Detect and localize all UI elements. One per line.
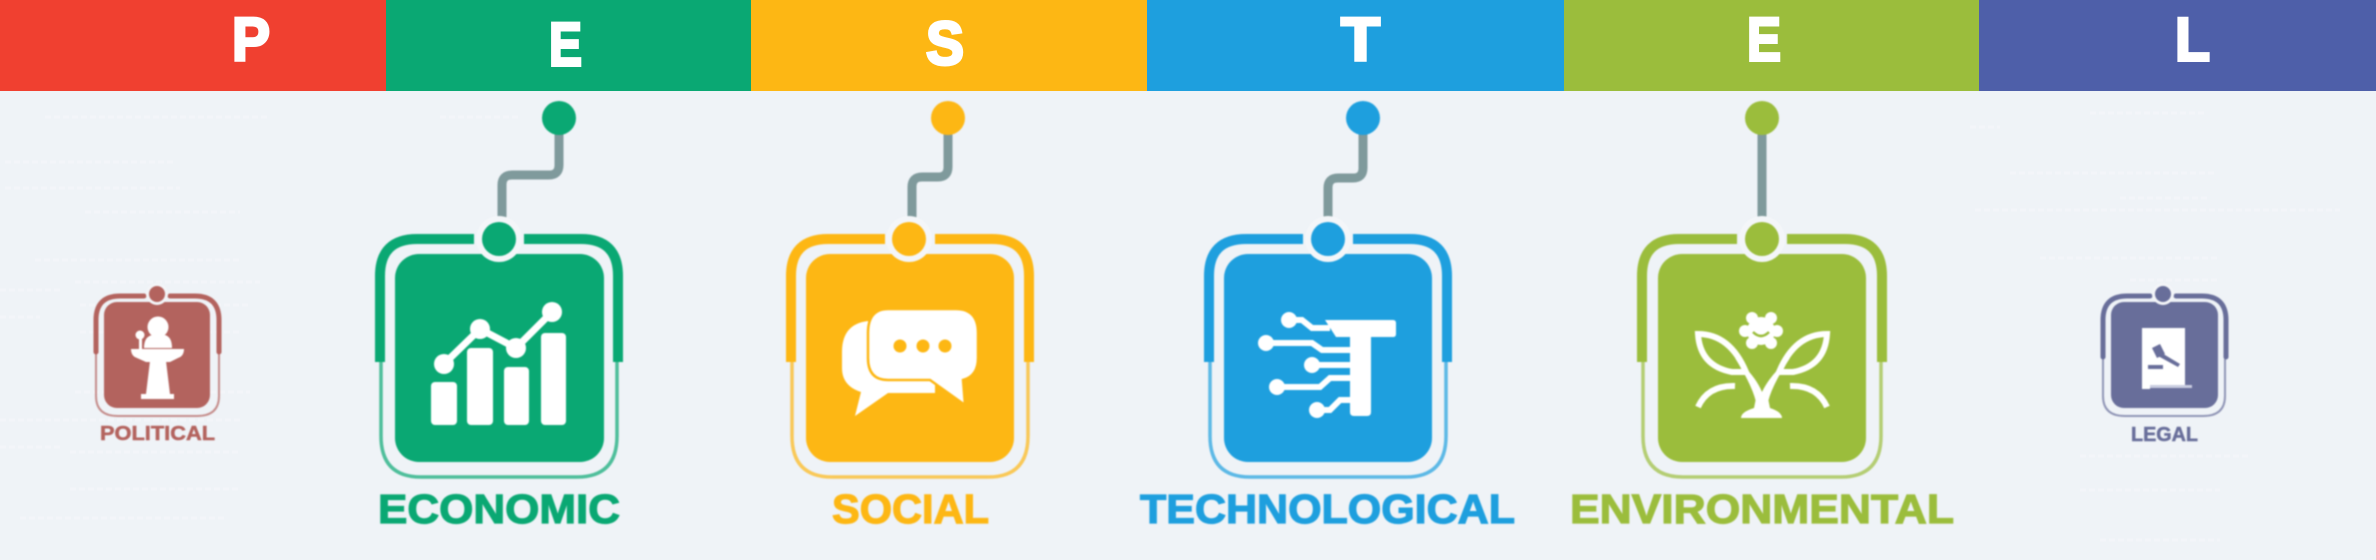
card frame bbox=[1209, 239, 1447, 477]
icon: flowering plant bbox=[1698, 312, 1827, 418]
card panel bbox=[1224, 254, 1432, 462]
legal small card bbox=[2103, 283, 2226, 446]
card panel bbox=[806, 254, 1014, 462]
card frame bbox=[791, 239, 1029, 477]
social column: SOCIAL bbox=[832, 486, 989, 532]
icon: chat bubbles bbox=[842, 309, 978, 416]
header band: S bbox=[751, 0, 1147, 91]
technological column: TECHNOLOGICAL bbox=[1140, 486, 1515, 532]
connector top dot bbox=[1745, 101, 1779, 135]
political small card bbox=[96, 283, 219, 445]
environmental column: ENVIRONMENTAL bbox=[1570, 486, 1954, 532]
connector bbox=[502, 128, 559, 226]
card panel bbox=[395, 254, 604, 462]
card frame bbox=[1642, 239, 1882, 477]
economic column: ECONOMIC bbox=[378, 486, 620, 532]
header band: L: L bbox=[2175, 6, 2210, 74]
header band: E economic: E bbox=[549, 10, 582, 78]
header band: P: P bbox=[232, 6, 270, 74]
card frame bbox=[380, 239, 618, 477]
header band: P bbox=[0, 0, 386, 91]
icon: bar chart with trend line bbox=[431, 302, 566, 425]
connector top dot bbox=[931, 101, 965, 135]
header band: S: S bbox=[926, 10, 964, 78]
header band: L bbox=[1979, 0, 2376, 91]
connector top dot bbox=[1346, 101, 1380, 135]
economic column bbox=[378, 101, 620, 532]
technological column bbox=[1140, 101, 1515, 532]
header band: T: T bbox=[1341, 6, 1380, 74]
connector top dot bbox=[542, 101, 576, 135]
header band: E economic bbox=[386, 0, 751, 91]
social column bbox=[791, 101, 1029, 532]
card panel bbox=[1658, 254, 1866, 462]
connector bbox=[912, 128, 948, 226]
connector bbox=[1328, 128, 1363, 226]
header band: E environmental bbox=[1564, 0, 1979, 91]
icon: speaker at podium bbox=[131, 316, 184, 399]
header band: E environmental: E bbox=[1747, 6, 1781, 74]
icon: gavel on document bbox=[2142, 328, 2192, 389]
legal small card: LEGAL bbox=[2131, 424, 2198, 446]
connector bbox=[1758, 128, 1766, 226]
environmental column bbox=[1570, 101, 1954, 532]
political small card: POLITICAL bbox=[100, 423, 215, 445]
header band: T bbox=[1147, 0, 1564, 91]
icon: circuit letter T bbox=[1258, 312, 1396, 418]
